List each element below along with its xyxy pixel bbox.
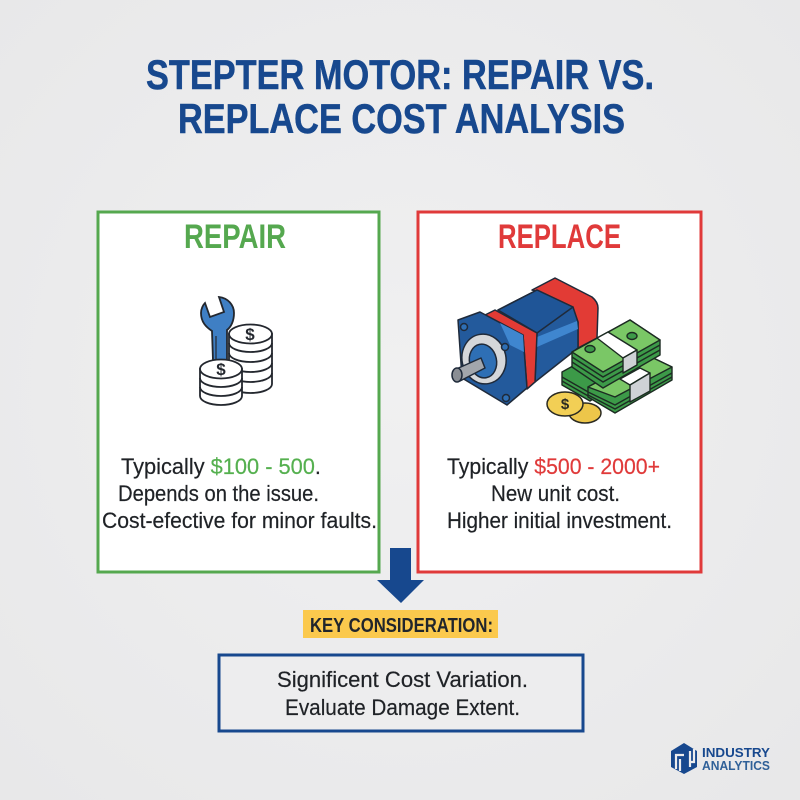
replace heading: REPLACE <box>498 218 621 256</box>
replace text: Typically $500 - 2000+ <box>447 454 660 479</box>
replace text <box>447 454 672 533</box>
panel: repair <box>98 212 379 572</box>
logo <box>671 743 771 774</box>
title <box>146 51 654 142</box>
key consideration label: KEY CONSIDERATION: <box>310 615 493 637</box>
icon: gold coins <box>547 392 601 423</box>
callout box <box>219 655 583 731</box>
logo: INDUSTRY <box>702 746 771 760</box>
callout box: Significent Cost Variation. <box>277 667 528 692</box>
repair text: Depends on the issue. <box>118 481 319 506</box>
panel: repair: $ <box>245 325 255 344</box>
logo: ANALYTICS <box>702 759 770 773</box>
arrow <box>377 548 424 603</box>
repair heading: REPAIR <box>184 218 286 256</box>
panel: replace <box>418 212 701 572</box>
key consideration label <box>303 610 498 638</box>
callout box: Evaluate Damage Extent. <box>285 695 520 720</box>
title: REPLACE COST ANALYSIS <box>178 95 625 142</box>
repair text: Typically $100 - 500. <box>121 454 321 479</box>
panel: repair: $ <box>216 360 226 379</box>
repair text: Cost-efective for minor faults. <box>102 508 377 533</box>
icon: wrench and coins <box>200 297 272 405</box>
icon: motor <box>452 278 598 405</box>
repair text <box>102 454 377 533</box>
icon: money stacks <box>562 320 672 413</box>
panel: replace: $ <box>561 396 570 413</box>
replace text: New unit cost. <box>491 481 620 506</box>
title: STEPTER MOTOR: REPAIR VS. <box>146 51 654 98</box>
replace text: Higher initial investment. <box>447 508 672 533</box>
